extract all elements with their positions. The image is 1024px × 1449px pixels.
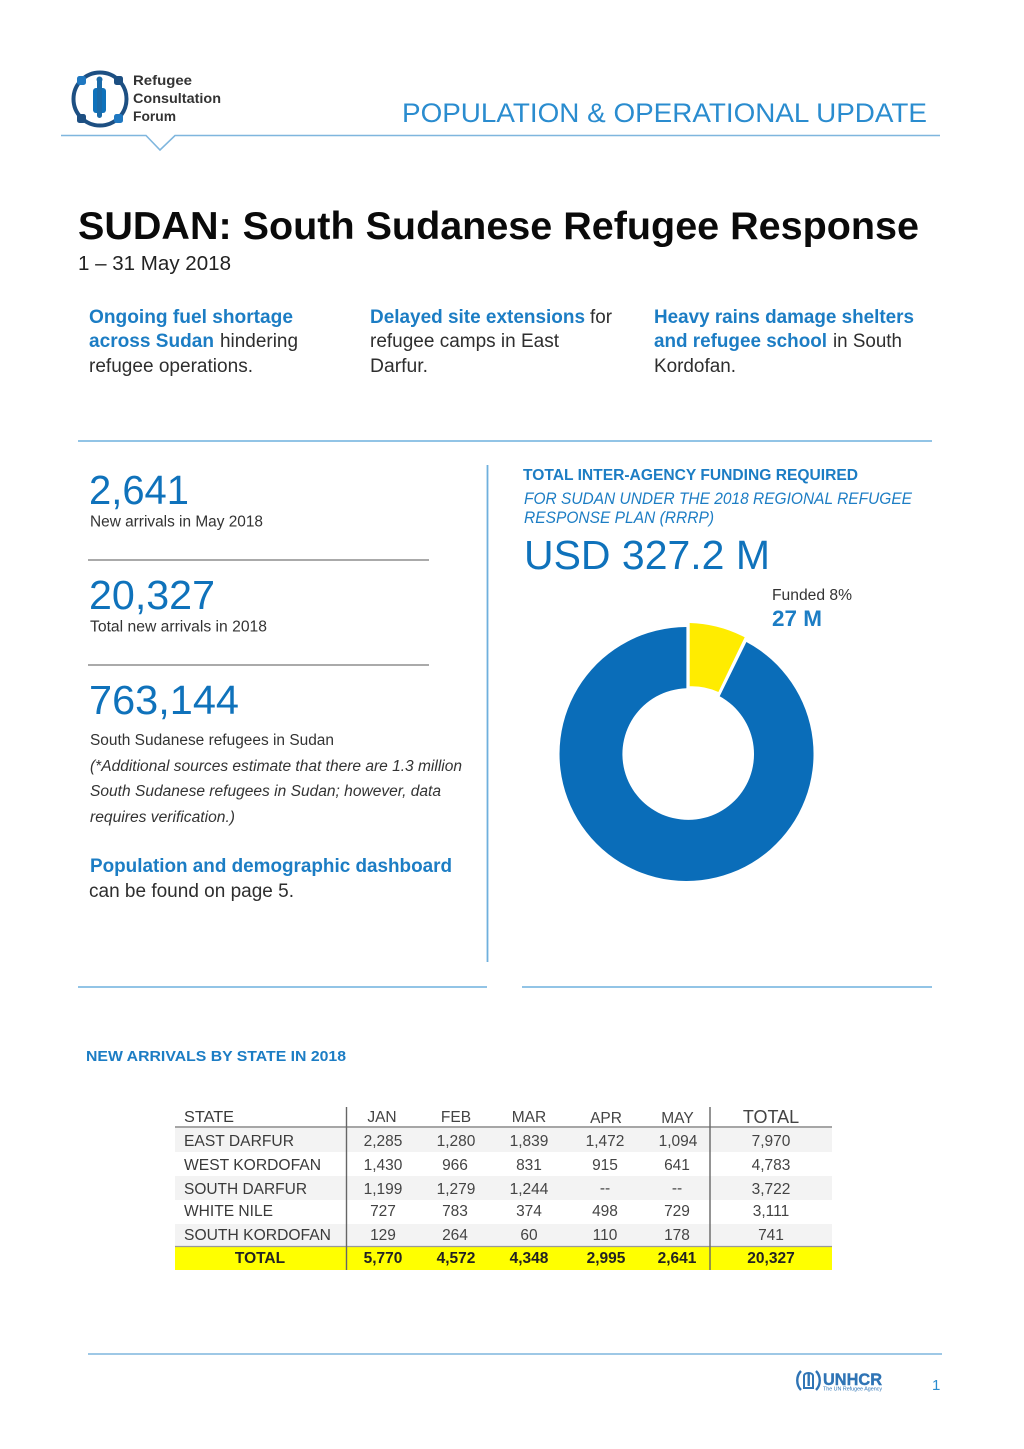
row: South Darfur: SOUTH DARFUR xyxy=(184,1181,307,1198)
dashboard note: Population and demographic dashboard xyxy=(90,856,452,877)
row: White Nile: 783 xyxy=(442,1203,468,1220)
donut chart xyxy=(560,623,814,881)
table heading: NEW ARRIVALS BY STATE IN 2018 xyxy=(86,1048,346,1065)
header row: JAN xyxy=(367,1109,397,1126)
row: South Kordofan xyxy=(184,1227,784,1244)
row: South Kordofan: SOUTH KORDOFAN xyxy=(184,1227,331,1244)
stat: South Sudanese refugees: South Sudanese refugees in Sudan xyxy=(90,732,334,749)
row: South Kordofan: 129 xyxy=(370,1227,396,1244)
row: White Nile: 3,111 xyxy=(753,1203,789,1220)
funded label: Funded 8% xyxy=(772,587,852,604)
highlight: site extensions: Darfur. xyxy=(370,356,428,377)
icon: UNHCR logo: UNHCR xyxy=(823,1370,882,1389)
row: West Kordofan: 915 xyxy=(592,1157,618,1174)
table: new arrivals by state xyxy=(175,1107,832,1270)
dashboard note: can be found on page 5. xyxy=(89,881,294,902)
highlights xyxy=(89,307,914,377)
icon: UNHCR logo xyxy=(797,1370,882,1392)
row: White Nile: 498 xyxy=(592,1203,618,1220)
header row: MAY xyxy=(661,1110,694,1127)
row: South Darfur: 3,722 xyxy=(752,1181,790,1198)
stat: new arrivals May: New arrivals in May 2018 xyxy=(90,514,263,530)
stat: total new arrivals: Total new arrivals in 2018 xyxy=(90,618,267,636)
funding heading: TOTAL INTER-AGENCY FUNDING REQUIRED xyxy=(523,467,858,484)
row: South Darfur: -- xyxy=(600,1180,610,1197)
highlight: fuel shortage: refugee operations. xyxy=(89,356,253,377)
row: South Kordofan: 110 xyxy=(593,1227,618,1244)
stat: South Sudanese refugees xyxy=(89,677,462,826)
highlight: fuel shortage: across Sudan xyxy=(89,331,214,352)
row: total: 2,995 xyxy=(587,1250,626,1267)
row: total: TOTAL xyxy=(235,1250,285,1267)
stat: South Sudanese refugees: 763,144 xyxy=(89,677,239,723)
row: West Kordofan: 966 xyxy=(442,1157,468,1174)
row: South Darfur xyxy=(184,1180,790,1198)
panel: funding xyxy=(523,467,913,881)
row: East Darfur: 1,472 xyxy=(586,1133,624,1150)
row: East Darfur: 1,094 xyxy=(659,1133,698,1150)
panel: key figures xyxy=(88,467,462,902)
row: West Kordofan: 831 xyxy=(516,1157,542,1174)
funding heading: FOR SUDAN UNDER THE 2018 REGIONAL REFUGEE xyxy=(524,490,913,508)
stat: new arrivals May xyxy=(89,467,263,530)
highlight: site extensions: for xyxy=(590,307,613,328)
header xyxy=(61,72,940,150)
row: White Nile: 727 xyxy=(370,1203,396,1220)
header row: MAR xyxy=(512,1109,546,1126)
header row: APR xyxy=(590,1110,622,1127)
row: West Kordofan: WEST KORDOFAN xyxy=(184,1157,321,1174)
highlight: heavy rains: and refugee school xyxy=(654,331,827,352)
stat: new arrivals May: 2,641 xyxy=(89,467,189,513)
row: total: 20,327 xyxy=(747,1250,795,1267)
row: South Kordofan: 178 xyxy=(664,1227,690,1244)
date: 1 – 31 May 2018 xyxy=(78,253,231,275)
row: East Darfur: EAST DARFUR xyxy=(184,1133,294,1150)
row: East Darfur: 1,280 xyxy=(437,1133,476,1150)
highlight: heavy rains xyxy=(654,307,914,377)
header row: STATE xyxy=(184,1109,234,1126)
funded label xyxy=(772,587,852,631)
funding heading: RESPONSE PLAN (RRRP) xyxy=(524,509,714,527)
row: South Kordofan: 264 xyxy=(442,1227,468,1244)
funded label: 27 M xyxy=(772,606,822,631)
stat: South Sudanese refugees: (*Additional sources estimate that there are 1.3 million xyxy=(90,758,462,775)
footer xyxy=(797,1370,940,1394)
highlight: fuel shortage: Ongoing fuel shortage xyxy=(89,307,293,328)
highlight: heavy rains: in South xyxy=(833,331,902,352)
row: White Nile: WHITE NILE xyxy=(184,1203,273,1220)
row: total: 2,641 xyxy=(658,1250,697,1267)
row: South Darfur: -- xyxy=(672,1180,682,1197)
row: South Kordofan: 741 xyxy=(758,1227,784,1244)
title: SUDAN: South Sudanese Refugee Response xyxy=(78,205,919,248)
row: White Nile: 374 xyxy=(516,1203,542,1220)
row: East Darfur: 2,285 xyxy=(364,1133,402,1150)
stat: South Sudanese refugees: requires verification.) xyxy=(90,809,235,826)
row: South Darfur: 1,199 xyxy=(364,1181,402,1198)
highlight: heavy rains: Heavy rains damage shelters xyxy=(654,307,914,328)
row: White Nile: 729 xyxy=(664,1203,690,1220)
highlight: site extensions: Delayed site extensions xyxy=(370,307,585,328)
stat: total new arrivals xyxy=(89,572,267,636)
icon: UNHCR logo: The UN Refugee Agency xyxy=(823,1386,882,1392)
row: South Kordofan: 60 xyxy=(520,1227,538,1244)
row: West Kordofan: 641 xyxy=(664,1157,690,1174)
icon: Refugee Consultation Forum logo: Refugee xyxy=(133,72,192,88)
row: West Kordofan xyxy=(184,1157,790,1174)
stat: total new arrivals: 20,327 xyxy=(89,572,215,618)
highlight: site extensions xyxy=(370,307,613,377)
icon: Refugee Consultation Forum logo: Consultation xyxy=(133,90,221,106)
icon: Refugee Consultation Forum logo xyxy=(74,72,221,126)
row: total: 4,348 xyxy=(510,1250,549,1267)
highlight: fuel shortage xyxy=(89,307,298,377)
header row: FEB xyxy=(441,1109,471,1126)
stat: South Sudanese refugees: South Sudanese refugees in Sudan; however, data xyxy=(90,783,441,800)
funding heading xyxy=(523,467,913,527)
icon: Refugee Consultation Forum logo: Forum xyxy=(133,108,176,124)
highlight: heavy rains: Kordofan. xyxy=(654,356,736,377)
row: South Darfur: 1,279 xyxy=(437,1181,475,1198)
header rule with notch xyxy=(61,136,940,150)
row: White Nile xyxy=(184,1203,789,1220)
row: South Darfur: 1,244 xyxy=(510,1181,549,1198)
highlight: fuel shortage: hindering xyxy=(220,331,298,352)
row: West Kordofan: 1,430 xyxy=(364,1157,403,1174)
header row: TOTAL xyxy=(743,1107,799,1127)
row: total: 5,770 xyxy=(364,1250,402,1267)
funding total: USD 327.2 M xyxy=(524,532,770,578)
dashboard note xyxy=(89,856,452,902)
row: total: 4,572 xyxy=(437,1250,475,1267)
header row xyxy=(184,1107,799,1127)
row: East Darfur: 1,839 xyxy=(510,1133,548,1150)
row: West Kordofan: 4,783 xyxy=(752,1157,790,1174)
page number: 1 xyxy=(932,1377,940,1394)
report label: POPULATION & OPERATIONAL UPDATE xyxy=(402,98,927,128)
row: East Darfur xyxy=(184,1133,791,1150)
highlight: site extensions: refugee camps in East xyxy=(370,331,560,352)
row: total xyxy=(235,1250,795,1267)
row: East Darfur: 7,970 xyxy=(752,1133,791,1150)
